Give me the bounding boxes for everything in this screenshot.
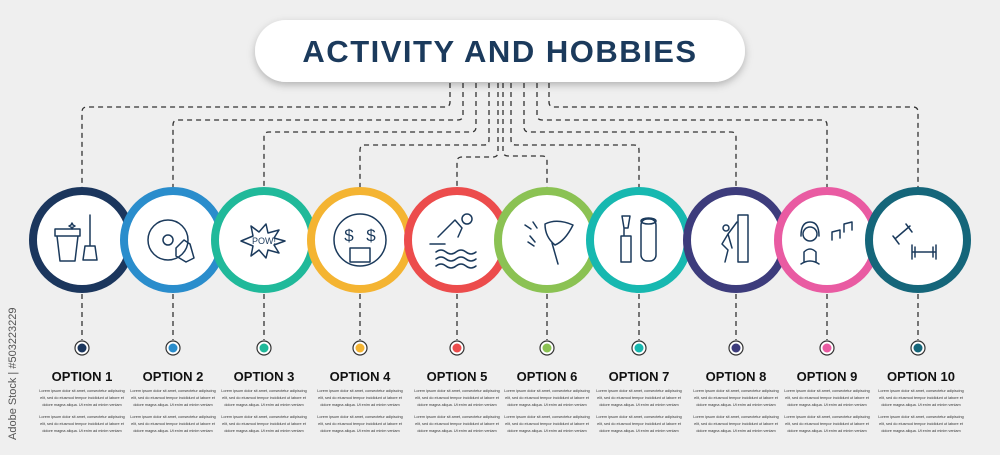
dot 3 xyxy=(257,341,271,355)
dot 5 xyxy=(450,341,464,355)
description texts: dolore magna aliqua. Ut enim ad minim veniam xyxy=(507,429,587,433)
description texts: dolore magna aliqua. Ut enim ad minim veniam xyxy=(320,429,400,433)
icon: pow burst: POW! xyxy=(252,236,276,246)
description texts: dolore magna aliqua. Ut enim ad minim veniam xyxy=(42,403,122,407)
description texts: elit, sed do eiusmod tempor incididunt ut labore et xyxy=(415,396,500,400)
description texts: dolore magna aliqua. Ut enim ad minim veniam xyxy=(881,403,961,407)
description texts: elit, sed do eiusmod tempor incididunt ut labore et xyxy=(785,396,870,400)
option labels: OPTION 8 xyxy=(706,369,766,384)
description texts: elit, sed do eiusmod tempor incididunt ut labore et xyxy=(694,396,779,400)
description texts: dolore magna aliqua. Ut enim ad minim veniam xyxy=(42,429,122,433)
description texts: Lorem ipsum dolor sit amet, consectetur adipiscing xyxy=(39,415,125,419)
icon: money face: $ xyxy=(344,226,354,245)
description texts: Lorem ipsum dolor sit amet, consectetur adipiscing xyxy=(39,389,125,393)
description texts: dolore magna aliqua. Ut enim ad minim veniam xyxy=(224,429,304,433)
side watermark text: Adobe Stock | #503223229 xyxy=(7,307,19,440)
option labels: OPTION 1 xyxy=(52,369,112,384)
description texts: elit, sed do eiusmod tempor incididunt ut labore et xyxy=(222,396,307,400)
option labels: OPTION 4 xyxy=(330,369,391,384)
circle 4 xyxy=(311,191,409,289)
description texts: elit, sed do eiusmod tempor incididunt ut labore et xyxy=(879,422,964,426)
icon: money face xyxy=(334,214,386,266)
description texts: elit, sed do eiusmod tempor incididunt ut labore et xyxy=(694,422,779,426)
circle 3 xyxy=(215,191,313,289)
option labels: OPTION 10 xyxy=(887,369,955,384)
description texts: Lorem ipsum dolor sit amet, consectetur adipiscing xyxy=(596,415,682,419)
circle 1 xyxy=(33,191,131,289)
description texts: Lorem ipsum dolor sit amet, consectetur adipiscing xyxy=(596,389,682,393)
description texts: Lorem ipsum dolor sit amet, consectetur adipiscing xyxy=(504,389,590,393)
description texts: Lorem ipsum dolor sit amet, consectetur adipiscing xyxy=(784,415,870,419)
dot 9 xyxy=(820,341,834,355)
circles xyxy=(33,191,967,289)
description texts: Lorem ipsum dolor sit amet, consectetur adipiscing xyxy=(317,389,403,393)
icon: chisel and log xyxy=(621,216,656,262)
indicator dots xyxy=(75,341,925,355)
description texts: dolore magna aliqua. Ut enim ad minim veniam xyxy=(417,403,497,407)
icon: dumbbells xyxy=(893,224,936,259)
option labels: OPTION 3 xyxy=(234,369,294,384)
circle 8 xyxy=(687,191,785,289)
description texts: elit, sed do eiusmod tempor incididunt ut labore et xyxy=(40,396,125,400)
circle 6 xyxy=(498,191,596,289)
description texts: elit, sed do eiusmod tempor incididunt ut labore et xyxy=(505,396,590,400)
title xyxy=(255,20,745,82)
description texts: dolore magna aliqua. Ut enim ad minim veniam xyxy=(787,403,867,407)
description texts: Lorem ipsum dolor sit amet, consectetur adipiscing xyxy=(693,415,779,419)
icon: vinyl disc and hand xyxy=(148,220,194,262)
dot 6 xyxy=(540,341,554,355)
description texts: elit, sed do eiusmod tempor incididunt ut labore et xyxy=(318,422,403,426)
description texts: elit, sed do eiusmod tempor incididunt ut labore et xyxy=(415,422,500,426)
option labels: OPTION 5 xyxy=(427,369,487,384)
description texts: dolore magna aliqua. Ut enim ad minim veniam xyxy=(696,403,776,407)
icon: pow burst xyxy=(241,224,285,258)
description texts: dolore magna aliqua. Ut enim ad minim veniam xyxy=(599,403,679,407)
option labels: OPTION 2 xyxy=(143,369,203,384)
description texts: Lorem ipsum dolor sit amet, consectetur adipiscing xyxy=(130,415,216,419)
description texts: dolore magna aliqua. Ut enim ad minim veniam xyxy=(599,429,679,433)
icon: bucket and mop xyxy=(55,215,97,261)
circle 2 xyxy=(124,191,222,289)
circle 5 xyxy=(408,191,506,289)
description texts: elit, sed do eiusmod tempor incididunt ut labore et xyxy=(318,396,403,400)
description texts: dolore magna aliqua. Ut enim ad minim veniam xyxy=(133,403,213,407)
description texts: dolore magna aliqua. Ut enim ad minim veniam xyxy=(696,429,776,433)
description texts: dolore magna aliqua. Ut enim ad minim veniam xyxy=(417,429,497,433)
icon: butterfly net xyxy=(525,221,573,264)
description texts xyxy=(39,389,964,433)
description texts: Lorem ipsum dolor sit amet, consectetur adipiscing xyxy=(878,389,964,393)
title: ACTIVITY AND HOBBIES xyxy=(302,34,698,69)
icon: climber xyxy=(722,215,748,262)
icon: meditating with headphones xyxy=(801,222,852,264)
option labels xyxy=(52,369,955,384)
dot 7 xyxy=(632,341,646,355)
description texts: elit, sed do eiusmod tempor incididunt ut labore et xyxy=(505,422,590,426)
option labels: OPTION 7 xyxy=(609,369,669,384)
icon: swimmer diving xyxy=(430,214,476,268)
description texts: Lorem ipsum dolor sit amet, consectetur adipiscing xyxy=(317,415,403,419)
option labels: OPTION 9 xyxy=(797,369,857,384)
option labels: OPTION 6 xyxy=(517,369,577,384)
description texts: elit, sed do eiusmod tempor incididunt ut labore et xyxy=(131,422,216,426)
description texts: elit, sed do eiusmod tempor incididunt ut labore et xyxy=(131,396,216,400)
icon: money face: $ xyxy=(366,226,376,245)
description texts: elit, sed do eiusmod tempor incididunt ut labore et xyxy=(597,422,682,426)
description texts: elit, sed do eiusmod tempor incididunt ut labore et xyxy=(597,396,682,400)
description texts: Lorem ipsum dolor sit amet, consectetur adipiscing xyxy=(130,389,216,393)
dot 1 xyxy=(75,341,89,355)
description texts: Lorem ipsum dolor sit amet, consectetur adipiscing xyxy=(784,389,870,393)
description texts: dolore magna aliqua. Ut enim ad minim veniam xyxy=(320,403,400,407)
description texts: elit, sed do eiusmod tempor incididunt ut labore et xyxy=(222,422,307,426)
description texts: Lorem ipsum dolor sit amet, consectetur adipiscing xyxy=(221,415,307,419)
description texts: elit, sed do eiusmod tempor incididunt ut labore et xyxy=(879,396,964,400)
description texts: dolore magna aliqua. Ut enim ad minim veniam xyxy=(787,429,867,433)
circle 7 xyxy=(590,191,688,289)
description texts: dolore magna aliqua. Ut enim ad minim veniam xyxy=(133,429,213,433)
description texts: Lorem ipsum dolor sit amet, consectetur adipiscing xyxy=(504,415,590,419)
description texts: Lorem ipsum dolor sit amet, consectetur adipiscing xyxy=(414,415,500,419)
dot 4 xyxy=(353,341,367,355)
description texts: dolore magna aliqua. Ut enim ad minim veniam xyxy=(881,429,961,433)
dot 2 xyxy=(166,341,180,355)
description texts: Lorem ipsum dolor sit amet, consectetur adipiscing xyxy=(414,389,500,393)
description texts: elit, sed do eiusmod tempor incididunt ut labore et xyxy=(785,422,870,426)
description texts: Lorem ipsum dolor sit amet, consectetur adipiscing xyxy=(693,389,779,393)
description texts: dolore magna aliqua. Ut enim ad minim veniam xyxy=(224,403,304,407)
description texts: elit, sed do eiusmod tempor incididunt ut labore et xyxy=(40,422,125,426)
description texts: Lorem ipsum dolor sit amet, consectetur adipiscing xyxy=(221,389,307,393)
circle 10 xyxy=(869,191,967,289)
dot 8 xyxy=(729,341,743,355)
dot 10 xyxy=(911,341,925,355)
description texts: dolore magna aliqua. Ut enim ad minim veniam xyxy=(507,403,587,407)
description texts: Lorem ipsum dolor sit amet, consectetur adipiscing xyxy=(878,415,964,419)
icons xyxy=(55,214,936,268)
connectors xyxy=(82,83,918,340)
circle 9 xyxy=(778,191,876,289)
